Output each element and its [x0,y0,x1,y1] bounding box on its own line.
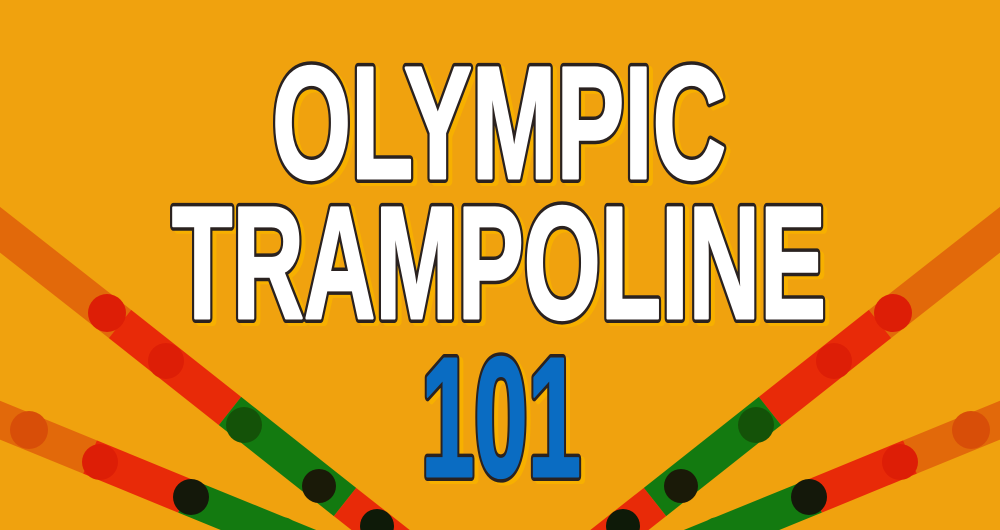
title line: OLYMPIC: OLYMPIC [276,36,730,215]
title line: OLYMPIC [272,33,730,215]
title line: 101: 101 [421,323,581,513]
title line: 101 [421,323,585,516]
stripes: right [580,214,1000,530]
title line: 101: 101 [425,326,585,516]
stripes: left [0,214,420,530]
title line: OLYMPIC: OLYMPIC [272,33,726,212]
title [172,33,830,516]
title line: OLYMPIC: OLYMPIC [272,33,726,212]
title line: 101: 101 [421,323,581,513]
upper left stripe [0,214,420,530]
